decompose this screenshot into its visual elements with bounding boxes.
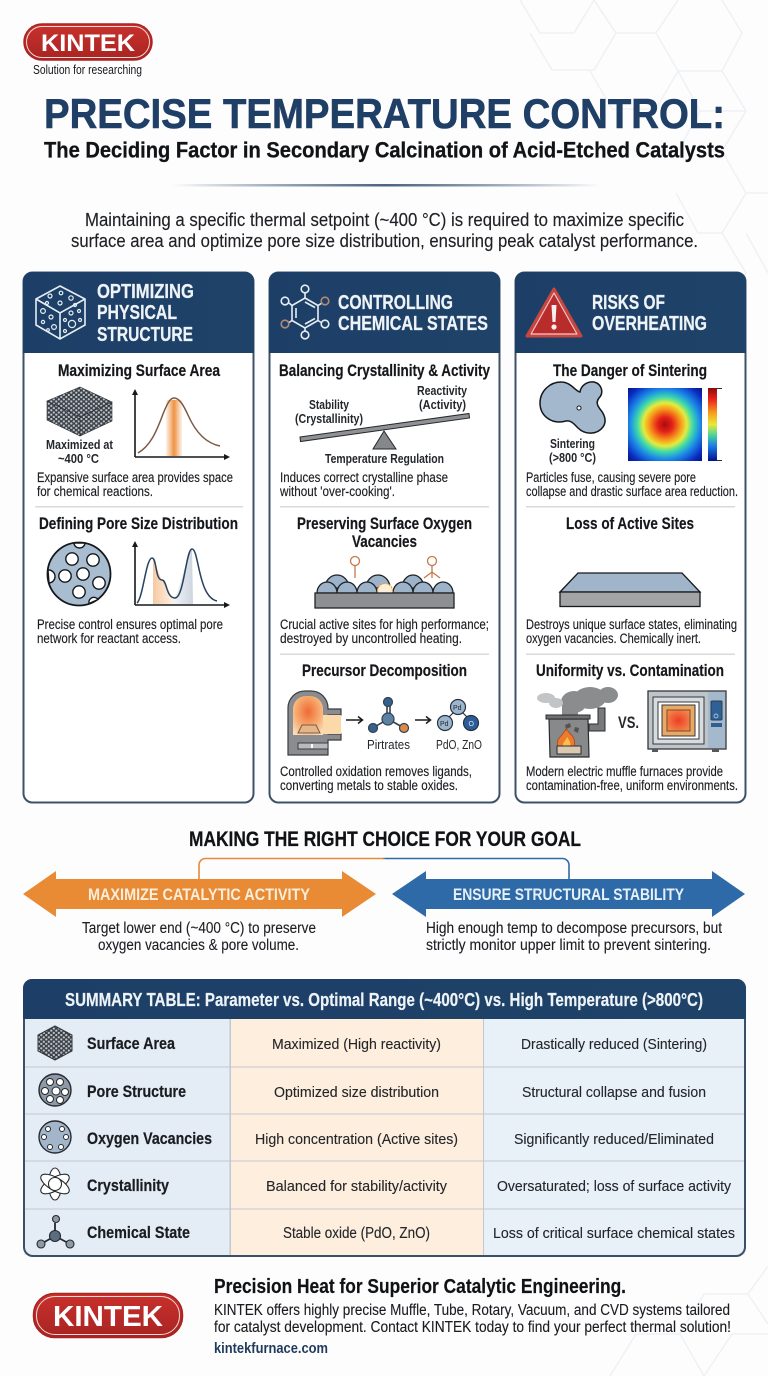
- logo: KINTEK footer: [34, 1294, 182, 1338]
- panel header: [23, 272, 254, 353]
- icon: oxides: O: [468, 721, 474, 728]
- icon: warning triangle: [527, 289, 581, 336]
- sub-heading: pore size: Defining Pore Size Distribution: [39, 514, 238, 533]
- panel heading: [97, 281, 194, 346]
- label: sintering: [549, 436, 596, 465]
- icon: chemical state molecule: [37, 1216, 74, 1248]
- sub-heading: surface area: Maximizing Surface Area: [58, 361, 220, 380]
- arrow: ensure structural stability: ENSURE STRUCTURAL STABILITY: [453, 886, 684, 904]
- text: crystallinity: [279, 470, 448, 499]
- panel: optimizing physical structure: [23, 272, 254, 802]
- icon: oxygen vacancies: [39, 1121, 71, 1153]
- sub-heading: active sites: Loss of Active Sites: [566, 514, 694, 533]
- row: oxygen vacancies: Significantly reduced/Eliminated: [514, 1131, 714, 1148]
- arrow: [346, 716, 362, 724]
- panel heading: RISKS OF: [592, 292, 665, 314]
- label: vs: VS.: [618, 713, 639, 732]
- arrow: [415, 716, 430, 724]
- row: surface area: Surface Area: [87, 1034, 175, 1053]
- labels: scale: Stability: [309, 397, 350, 412]
- intro text: surface area and optimize pore size distribution, ensuring peak catalyst performance.: [71, 230, 698, 251]
- panel: controlling chemical states: [269, 272, 500, 802]
- icon: fused particles: [540, 382, 605, 433]
- labels: scale: Reactivity: [417, 383, 468, 398]
- panel header: [269, 272, 500, 353]
- row: oxygen vacancies: [39, 1121, 714, 1153]
- label: sintering: Sintering: [550, 436, 595, 451]
- row: oxygen vacancies: High concentration (Active sites): [255, 1131, 458, 1148]
- intro text: Maintaining a specific thermal setpoint (~400 °C) is required to maximize specific: [85, 209, 684, 230]
- row: crystallinity: Crystallinity: [87, 1176, 169, 1195]
- text: pore size: Precise control ensures optimal pore: [37, 617, 223, 632]
- legend: colour bar: [708, 388, 722, 461]
- panel heading: OVERHEATING: [592, 313, 707, 335]
- icon: surface area hexagon: [38, 1026, 72, 1060]
- row: chemical state: Loss of critical surface chemical states: [493, 1225, 735, 1242]
- icon: porous cube: [36, 286, 85, 339]
- text: precursor: Controlled oxidation removes ligands,: [280, 764, 472, 779]
- icon: crystallinity atom: [38, 1168, 72, 1200]
- text: surface area: Expansive surface area provides space: [37, 470, 233, 485]
- sub-heading: oxygen vacancies: Preserving Surface Oxygen: [297, 514, 472, 533]
- chart: pore distribution: [132, 541, 230, 608]
- logo: KINTEK top: [24, 24, 152, 60]
- logo: KINTEK footer: KINTEK: [53, 1301, 163, 1333]
- panel heading: [338, 292, 488, 335]
- text: oxygen vacancies: Crucial active sites for high performance;: [280, 617, 489, 632]
- arrow: maximize catalytic activity: MAXIMIZE CATALYTIC ACTIVITY: [88, 886, 310, 904]
- text: stability goal: High enough temp to decompose precursors, but: [426, 920, 723, 937]
- icon: coal burner with smoke: [537, 687, 618, 757]
- sub-heading: oxygen vacancies: Vacancies: [352, 532, 417, 551]
- text: active sites: oxygen vacancies. Chemically inert.: [526, 631, 701, 646]
- subtitle: The Deciding Factor in Secondary Calcination of Acid-Etched Catalysts: [44, 138, 725, 162]
- panel: risks of overheating: [515, 272, 746, 802]
- sub-heading: uniformity: Uniformity vs. Contamination: [536, 661, 724, 680]
- arrow: maximize catalytic activity: [23, 871, 376, 917]
- section heading: right choice: MAKING THE RIGHT CHOICE FOR YOUR GOAL: [189, 828, 581, 851]
- logo: KINTEK top: KINTEK: [41, 30, 136, 57]
- text: precursor: converting metals to stable oxides.: [280, 778, 458, 793]
- row: chemical state: [37, 1216, 735, 1248]
- intro text: [71, 209, 698, 251]
- text: stability goal: strictly monitor upper limit to prevent sintering.: [426, 937, 711, 954]
- label: sintering: (>800 °C): [549, 450, 596, 465]
- icon: molecule: [281, 285, 329, 339]
- row: crystallinity: [38, 1168, 731, 1200]
- row: pore structure: Structural collapse and fusion: [522, 1084, 706, 1101]
- icon: flat slab: [560, 573, 700, 606]
- text: sintering: Particles fuse, causing severe pore: [526, 470, 696, 485]
- icon: electric muffle furnace: [648, 691, 726, 752]
- row: oxygen vacancies: Oxygen Vacancies: [87, 1129, 212, 1148]
- label: pirtrates: Pirtrates: [367, 737, 410, 752]
- icon: porous block: [47, 387, 112, 436]
- icon: pore circle: [48, 542, 110, 606]
- panel header: [515, 272, 746, 353]
- footer heading: Precision Heat for Superior Catalytic Engineering.: [214, 1276, 626, 1298]
- row: surface area: [38, 1026, 707, 1060]
- panel heading: CHEMICAL STATES: [338, 313, 488, 335]
- row: crystallinity: Oversaturated; loss of surface activity: [497, 1178, 731, 1195]
- footer website: kintekfurnace.com: [214, 1340, 328, 1357]
- sub-heading: precursor: Precursor Decomposition: [302, 661, 467, 680]
- text: pore size: network for reactant access.: [37, 631, 181, 646]
- logo tagline: Solution for researching: [33, 63, 142, 77]
- icon: balance scale: [300, 414, 470, 449]
- row: pore structure: Pore Structure: [87, 1082, 186, 1101]
- arrow: ensure structural stability: [392, 871, 745, 917]
- text: active sites: [526, 617, 737, 646]
- icon: pore structure: [39, 1074, 71, 1106]
- text: oxygen vacancies: [280, 617, 489, 646]
- text: precursor: [280, 764, 472, 793]
- text: surface area: [37, 470, 233, 499]
- panel heading: PHYSICAL: [97, 302, 177, 324]
- labels: scale: (Activity): [419, 397, 466, 412]
- panel heading: STRUCTURE: [97, 324, 193, 346]
- text: uniformity: [526, 764, 738, 793]
- chart: surface area curve: [132, 389, 230, 460]
- text: oxygen vacancies: destroyed by uncontrolled heating.: [280, 631, 462, 646]
- row: pore structure: [39, 1074, 706, 1106]
- text: activity goal: Target lower end (~400 °C) to preserve: [82, 920, 316, 937]
- text: stability goal: [426, 920, 723, 954]
- sub-heading: oxygen vacancies: [297, 514, 472, 551]
- row: crystallinity: Balanced for stability/activity: [266, 1178, 447, 1195]
- footer text: [214, 1302, 731, 1336]
- panel heading: OPTIMIZING: [97, 281, 194, 303]
- text: uniformity: Modern electric muffle furnaces provide: [526, 764, 723, 779]
- icon: furnace: [288, 691, 341, 755]
- icon: oxides: Pd: [453, 705, 462, 712]
- summary table: [23, 979, 746, 1256]
- text: surface area: for chemical reactions.: [37, 484, 153, 499]
- row: pore structure: Optimized size distribution: [274, 1084, 439, 1101]
- connector bracket: [199, 858, 569, 879]
- sub-heading: sintering: The Danger of Sintering: [553, 361, 707, 380]
- label: oxides: PdO, ZnO: [436, 737, 482, 752]
- table header: [23, 979, 746, 1019]
- text: activity goal: oxygen vacancies & pore volume.: [98, 937, 299, 954]
- icon: precursor molecule: [368, 698, 408, 732]
- title: PRECISE TEMPERATURE CONTROL:: [44, 90, 725, 137]
- icon: oxides: Pd: [440, 721, 449, 728]
- text: pore size: [37, 617, 223, 646]
- label: maximized at 400: ~400 °C: [58, 451, 100, 466]
- labels: scale: [295, 383, 468, 466]
- labels: scale: Temperature Regulation: [325, 451, 444, 466]
- row: surface area: Maximized (High reactivity): [272, 1036, 441, 1053]
- sub-heading: crystallinity: Balancing Crystallinity & Activity: [279, 361, 490, 380]
- row: chemical state: Chemical State: [87, 1223, 190, 1242]
- text: crystallinity: Induces correct crystalline phase: [280, 470, 448, 485]
- labels: scale: (Crystallinity): [295, 411, 363, 426]
- icon: oxides: [438, 700, 478, 730]
- label: maximized at 400: [46, 437, 114, 466]
- panel heading: CONTROLLING: [338, 292, 453, 314]
- text: crystallinity: without 'over-cooking'.: [279, 484, 395, 499]
- text: sintering: [526, 470, 738, 499]
- text: activity goal: [82, 920, 316, 954]
- panel heading: [592, 292, 707, 335]
- row: chemical state: Stable oxide (PdO, ZnO): [283, 1225, 430, 1242]
- row: surface area: Drastically reduced (Sintering): [521, 1036, 707, 1053]
- chart: heat map: [628, 388, 702, 461]
- label: maximized at 400: Maximized at: [46, 437, 114, 452]
- icon: oxygen vacancy surface: [315, 556, 454, 608]
